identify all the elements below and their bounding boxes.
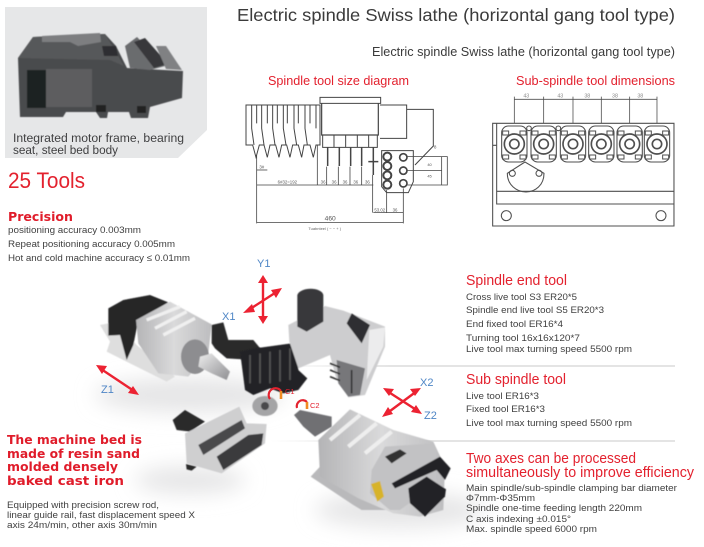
base plate — [311, 467, 393, 510]
block outline — [493, 123, 674, 226]
bed body text: linear guide rail, fast displacement speed X — [7, 510, 196, 521]
spindle end tool specs — [466, 292, 632, 355]
dimension labels: 36 — [353, 179, 359, 184]
precision specs: Repeat positioning accuracy 0.005mm — [8, 239, 175, 250]
chuck face — [181, 339, 209, 374]
spindle end tool specs: Live tool max turning speed 5500 rpm — [466, 344, 632, 355]
main title: Electric spindle Swiss lathe (horizontal gang tool type) — [237, 5, 675, 25]
caption: bed description: Integrated motor frame, bearing — [13, 131, 184, 145]
dimension lines: 43 — [557, 93, 563, 99]
sub spindle tool specs: Fixed tool ER16*3 — [466, 404, 545, 415]
two axes specs: Spindle one-time feeding length 220mm — [466, 503, 642, 514]
block: two axes — [466, 451, 695, 535]
slot — [385, 449, 407, 463]
axis labels — [101, 258, 437, 422]
sub spindle tool specs — [466, 391, 632, 429]
bed body text: Equipped with precision screw rod, — [7, 500, 159, 511]
axis labels: Z2 — [424, 410, 437, 422]
axis labels: Y1 — [257, 258, 270, 270]
axis labels: X2 — [420, 377, 433, 389]
tool row — [217, 433, 263, 470]
caption: bed description: seat, steel bed body — [13, 143, 119, 157]
dimension labels: 40 — [427, 162, 433, 167]
black cover — [347, 313, 370, 343]
spindle end tool specs: End fixed tool ER16*4 — [466, 319, 564, 330]
comb tool holder — [246, 105, 320, 157]
X1 axis — [247, 291, 278, 311]
axis labels: Z1 — [101, 384, 114, 396]
spindle end tool specs: Turning tool 16x16x120*7 — [466, 333, 580, 344]
chart: spindle tool size diagram — [246, 97, 447, 231]
dimension labels: 6#32=192 — [278, 179, 298, 184]
lower flange — [507, 162, 544, 192]
black chain assembly — [240, 343, 307, 395]
mounting holes — [501, 126, 666, 221]
black collet — [408, 477, 446, 517]
two axes heading — [466, 451, 695, 481]
Z1 axis — [101, 369, 134, 391]
two axes specs: Main spindle/sub-spindle clamping bar diameter — [466, 483, 678, 494]
dimension labels: 460 — [325, 216, 336, 223]
axis: Y1 X1 arrows — [96, 275, 422, 417]
axis labels: X1 — [222, 311, 235, 323]
heading: sub-spindle tool dimensions: Sub-spindle tool dimensions — [516, 73, 675, 88]
illustration: main spindle unit — [100, 295, 262, 382]
two axes specs: Φ7mm-Φ35mm — [466, 493, 535, 504]
dimension lines — [514, 93, 657, 123]
dimension lines: 43 — [523, 93, 529, 99]
icon: C2 rotation: C2 — [310, 401, 320, 410]
motor — [297, 289, 323, 332]
block: precision — [8, 209, 190, 264]
block: machine bed description — [7, 432, 196, 531]
body — [318, 409, 445, 517]
fin lines — [250, 348, 290, 383]
dimension labels: 45 — [427, 173, 433, 178]
two axes specs: C axis indexing ±0.015° — [466, 514, 571, 525]
Y1 axis — [262, 280, 264, 319]
spindle nose — [198, 353, 230, 380]
spindle nose — [294, 410, 332, 437]
dimension labels: 8 — [434, 144, 437, 149]
heading: spindle tool size diagram: Spindle tool size diagram — [268, 73, 409, 88]
grey block — [288, 306, 385, 397]
dimension labels — [259, 144, 437, 231]
dimension labels: 36 — [365, 179, 370, 184]
white highlight — [367, 327, 385, 380]
sub spindle tool heading: Sub spindle tool — [466, 372, 566, 388]
spindle end tool specs: Spindle end live tool S5 ER20*3 — [466, 305, 604, 316]
dark slot — [198, 420, 245, 455]
dimension labels: 53.02 — [374, 208, 386, 213]
dimension labels: 36 — [332, 179, 337, 184]
tool stack — [337, 360, 365, 397]
X2 axis — [386, 391, 417, 414]
tool circles — [382, 151, 447, 193]
sub spindle tool specs: Live tool ER16*3 — [466, 391, 539, 402]
tool holders — [502, 126, 670, 162]
precision specs — [8, 225, 190, 264]
icon: cast iron machine bed — [18, 33, 183, 118]
spindle end tool heading: Spindle end tool — [466, 273, 567, 289]
dimension labels: 3# — [259, 164, 265, 169]
two axes specs: Max. spindle speed 6000 rpm — [466, 524, 597, 535]
black tool post — [212, 322, 262, 360]
yellow connector — [371, 481, 384, 502]
subtitle: Electric spindle Swiss lathe (horizontal gang tool type) — [372, 45, 675, 59]
base plate — [100, 322, 175, 382]
icon: C1 rotation: C1 — [285, 387, 295, 396]
dimension labels: Tuabnteel ( − − + ) — [308, 226, 342, 231]
dimension lines: 38 — [584, 93, 590, 99]
icon: C1 rotation — [269, 387, 295, 399]
illustration: lower tool block — [173, 396, 278, 473]
block: sub spindle tool — [466, 372, 632, 429]
dimension labels: 36 — [343, 179, 348, 184]
foot — [186, 464, 197, 471]
caption: bed description — [13, 131, 184, 157]
panel: machine bed photo — [5, 7, 207, 158]
motor — [173, 410, 205, 432]
fins — [330, 415, 392, 453]
panel background — [5, 7, 207, 158]
centre tool block — [320, 97, 433, 175]
fins — [147, 307, 195, 335]
C1 chuck — [252, 396, 278, 416]
bed heading: baked cast iron — [7, 473, 124, 488]
bed heading: molded densely — [7, 459, 118, 474]
bed body text: axis 24m/min, other axis 30m/min — [7, 520, 157, 531]
icon: C2 rotation — [297, 400, 320, 410]
bed heading: The machine bed is — [7, 432, 142, 447]
bed heading — [7, 432, 142, 488]
front face — [370, 443, 437, 510]
illustration: gang tool post with motor — [240, 289, 385, 397]
silver plate — [185, 407, 267, 473]
chart: sub-spindle tool dimensions — [493, 93, 674, 226]
heading: 25 tools: 25 Tools — [8, 168, 85, 193]
black frame — [392, 457, 451, 488]
two axes heading: simultaneously to improve efficiency — [466, 465, 695, 481]
sub spindle tool specs: Live tool max turning speed 5500 rpm — [466, 418, 632, 429]
bed heading: made of resin sand — [7, 446, 140, 461]
dimension lines: 38 — [637, 93, 643, 99]
precision heading: Precision — [8, 209, 73, 224]
precision specs: Hot and cold machine accuracy ≤ 0.01mm — [8, 253, 190, 264]
block: spindle end tool — [466, 273, 632, 355]
bed body text — [7, 500, 196, 531]
section dividers — [270, 365, 675, 442]
two axes specs — [466, 483, 678, 535]
dimension labels: 36 — [393, 208, 398, 213]
dimension lines — [257, 145, 403, 223]
two axes heading: Two axes can be processed — [466, 451, 636, 467]
dimension lines: 38 — [612, 93, 618, 99]
spindle body — [136, 302, 212, 377]
dimension labels: 36 — [321, 179, 326, 184]
rear black motor mount — [108, 295, 168, 360]
precision specs: positioning accuracy 0.003mm — [8, 225, 141, 236]
illustration: sub spindle unit — [294, 409, 451, 517]
spindle end tool specs: Cross live tool S3 ER20*5 — [466, 292, 577, 303]
soft background shadows — [95, 377, 485, 528]
Z2 axis — [387, 391, 418, 411]
